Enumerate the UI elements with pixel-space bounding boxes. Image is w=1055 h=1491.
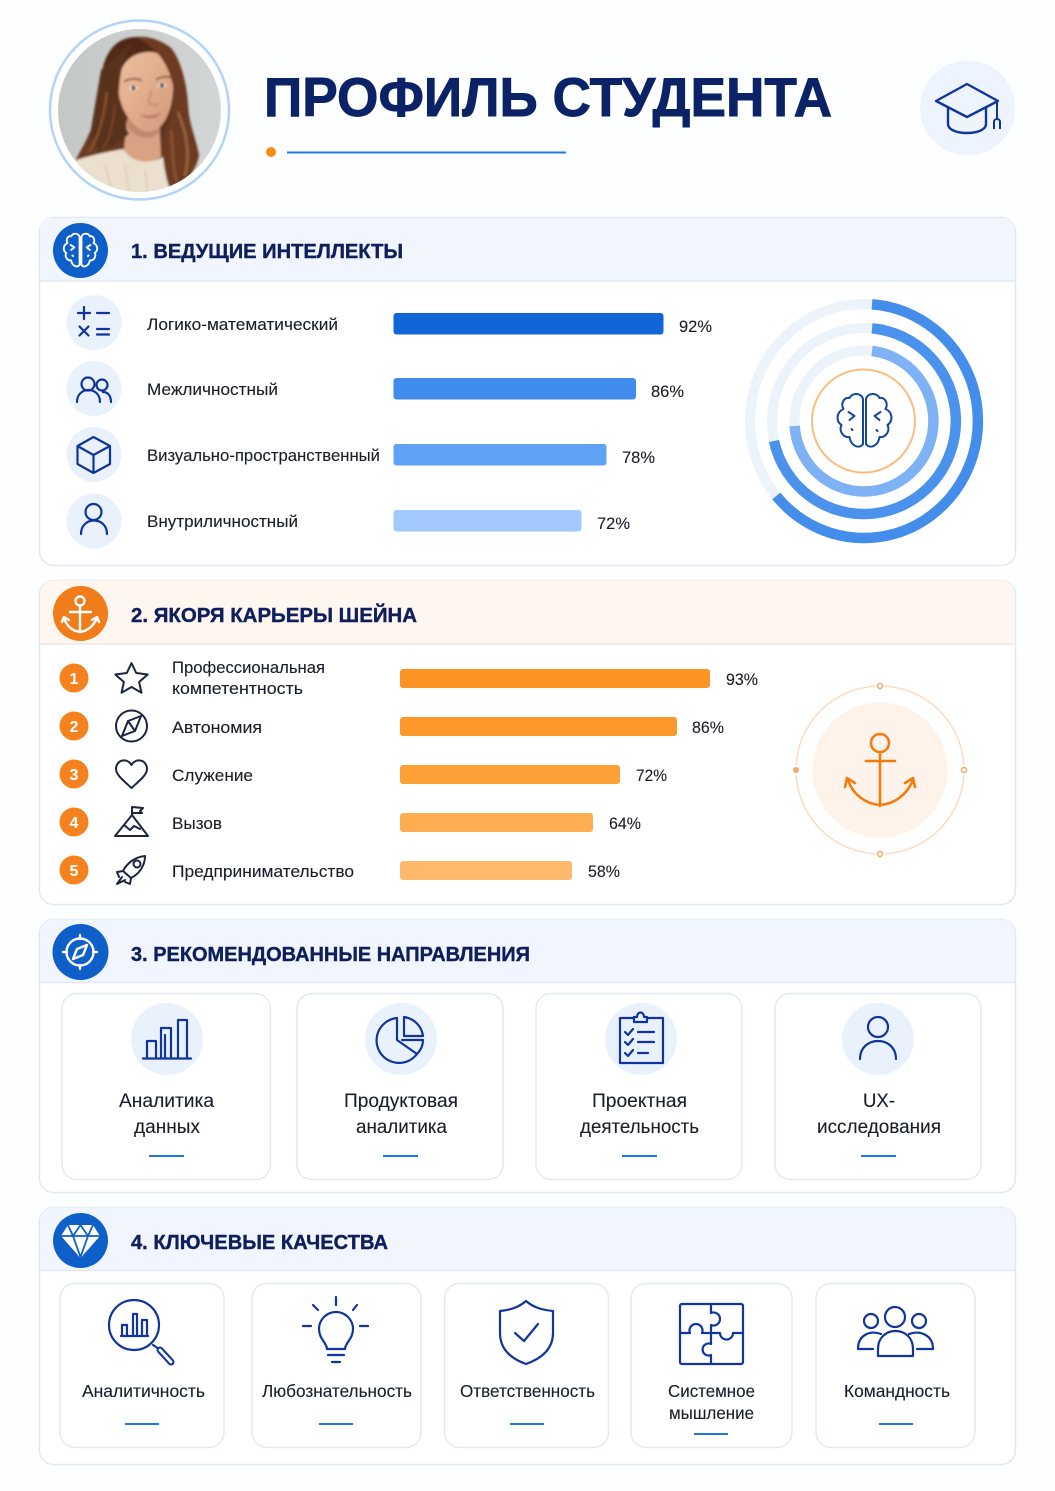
card: teamwork: Командность xyxy=(844,1381,950,1401)
row: autonomy xyxy=(60,710,724,742)
card: curiosity: Любознательность xyxy=(262,1381,412,1401)
row: entrepreneurship: 58% xyxy=(588,862,620,881)
card: systems thinking: мышление xyxy=(669,1403,754,1423)
row: entrepreneurship: 5 xyxy=(70,863,79,880)
row: intrapersonal xyxy=(66,494,630,548)
card: project activity xyxy=(536,994,742,1180)
card: UX research: исследования xyxy=(817,1116,941,1138)
row: challenge: Вызов xyxy=(172,814,222,833)
panel: key qualities xyxy=(40,1208,1016,1464)
row: logical-mathematical: 92% xyxy=(679,317,712,336)
card: product analytics: Продуктовая xyxy=(344,1090,458,1112)
card: data analytics xyxy=(62,994,270,1180)
icon: graduation cap xyxy=(920,60,1015,156)
card: curiosity xyxy=(252,1284,421,1448)
icon: brain badge xyxy=(53,223,108,278)
row: challenge xyxy=(60,807,641,836)
row: autonomy: Автономия xyxy=(172,718,262,737)
row: logical-mathematical xyxy=(66,295,712,350)
heading: 3. РЕКОМЕНДОВАННЫЕ НАПРАВЛЕНИЯ xyxy=(131,943,530,966)
row: intrapersonal: Внутриличностный xyxy=(147,512,298,531)
title underline with dot xyxy=(266,147,566,157)
portrait xyxy=(50,20,229,200)
panel: career anchors xyxy=(40,580,1016,904)
card: systems thinking: Системное xyxy=(668,1381,755,1401)
row: interpersonal: Межличностный xyxy=(147,380,278,399)
icon: anchor badge xyxy=(53,586,108,641)
card: analytical: Аналитичность xyxy=(82,1381,205,1401)
row: intrapersonal: 72% xyxy=(597,514,630,533)
card: data analytics: данных xyxy=(134,1116,200,1138)
row: professional competence xyxy=(60,658,758,698)
card: project activity: Проектная xyxy=(592,1090,687,1112)
card: systems thinking xyxy=(631,1284,792,1448)
card: project activity: деятельность xyxy=(580,1116,699,1138)
heading: 2. ЯКОРЯ КАРЬЕРЫ ШЕЙНА xyxy=(131,603,417,627)
card: UX research xyxy=(775,994,981,1180)
icon: anchor medallion xyxy=(791,681,969,859)
card: teamwork xyxy=(816,1284,975,1448)
panel: recommended directions xyxy=(40,920,1016,1192)
row: entrepreneurship: Предпринимательство xyxy=(172,862,354,881)
panel: leading intelligences xyxy=(40,218,1016,566)
row: service xyxy=(60,760,667,788)
row: challenge: 4 xyxy=(70,815,79,832)
card: responsibility xyxy=(444,1284,608,1448)
row: service: Служение xyxy=(172,766,253,785)
icon: diamond badge xyxy=(53,1213,108,1268)
card: UX research: UX- xyxy=(863,1090,895,1112)
card: product analytics: аналитика xyxy=(356,1116,447,1138)
row: professional competence: 1 xyxy=(70,671,79,688)
row: logical-mathematical: Логико-математический xyxy=(147,315,338,334)
row: professional competence: 93% xyxy=(726,670,758,689)
heading: 1. ВЕДУЩИЕ ИНТЕЛЛЕКТЫ xyxy=(131,240,403,263)
title: ПРОФИЛЬ СТУДЕНТА xyxy=(264,66,832,128)
row: service: 3 xyxy=(70,767,79,784)
row: interpersonal xyxy=(66,361,684,416)
row: professional competence: компетентность xyxy=(172,679,303,698)
card: analytical xyxy=(60,1284,224,1448)
card: responsibility: Ответственность xyxy=(460,1381,595,1401)
row: entrepreneurship xyxy=(60,856,620,884)
row: visual-spatial: 78% xyxy=(622,448,655,467)
icon: compass badge xyxy=(52,924,108,980)
row: autonomy: 2 xyxy=(70,719,79,736)
card: product analytics xyxy=(297,994,503,1180)
row: visual-spatial xyxy=(66,427,655,482)
row: interpersonal: 86% xyxy=(651,382,684,401)
row: professional competence: Профессиональная xyxy=(172,658,325,677)
chart: concentric rings xyxy=(750,304,978,538)
row: autonomy: 86% xyxy=(692,718,724,737)
row: service: 72% xyxy=(636,766,667,785)
heading: 4. КЛЮЧЕВЫЕ КАЧЕСТВА xyxy=(131,1231,388,1254)
row: challenge: 64% xyxy=(609,814,641,833)
row: visual-spatial: Визуально-пространственный xyxy=(147,446,380,465)
card: data analytics: Аналитика xyxy=(119,1090,214,1112)
